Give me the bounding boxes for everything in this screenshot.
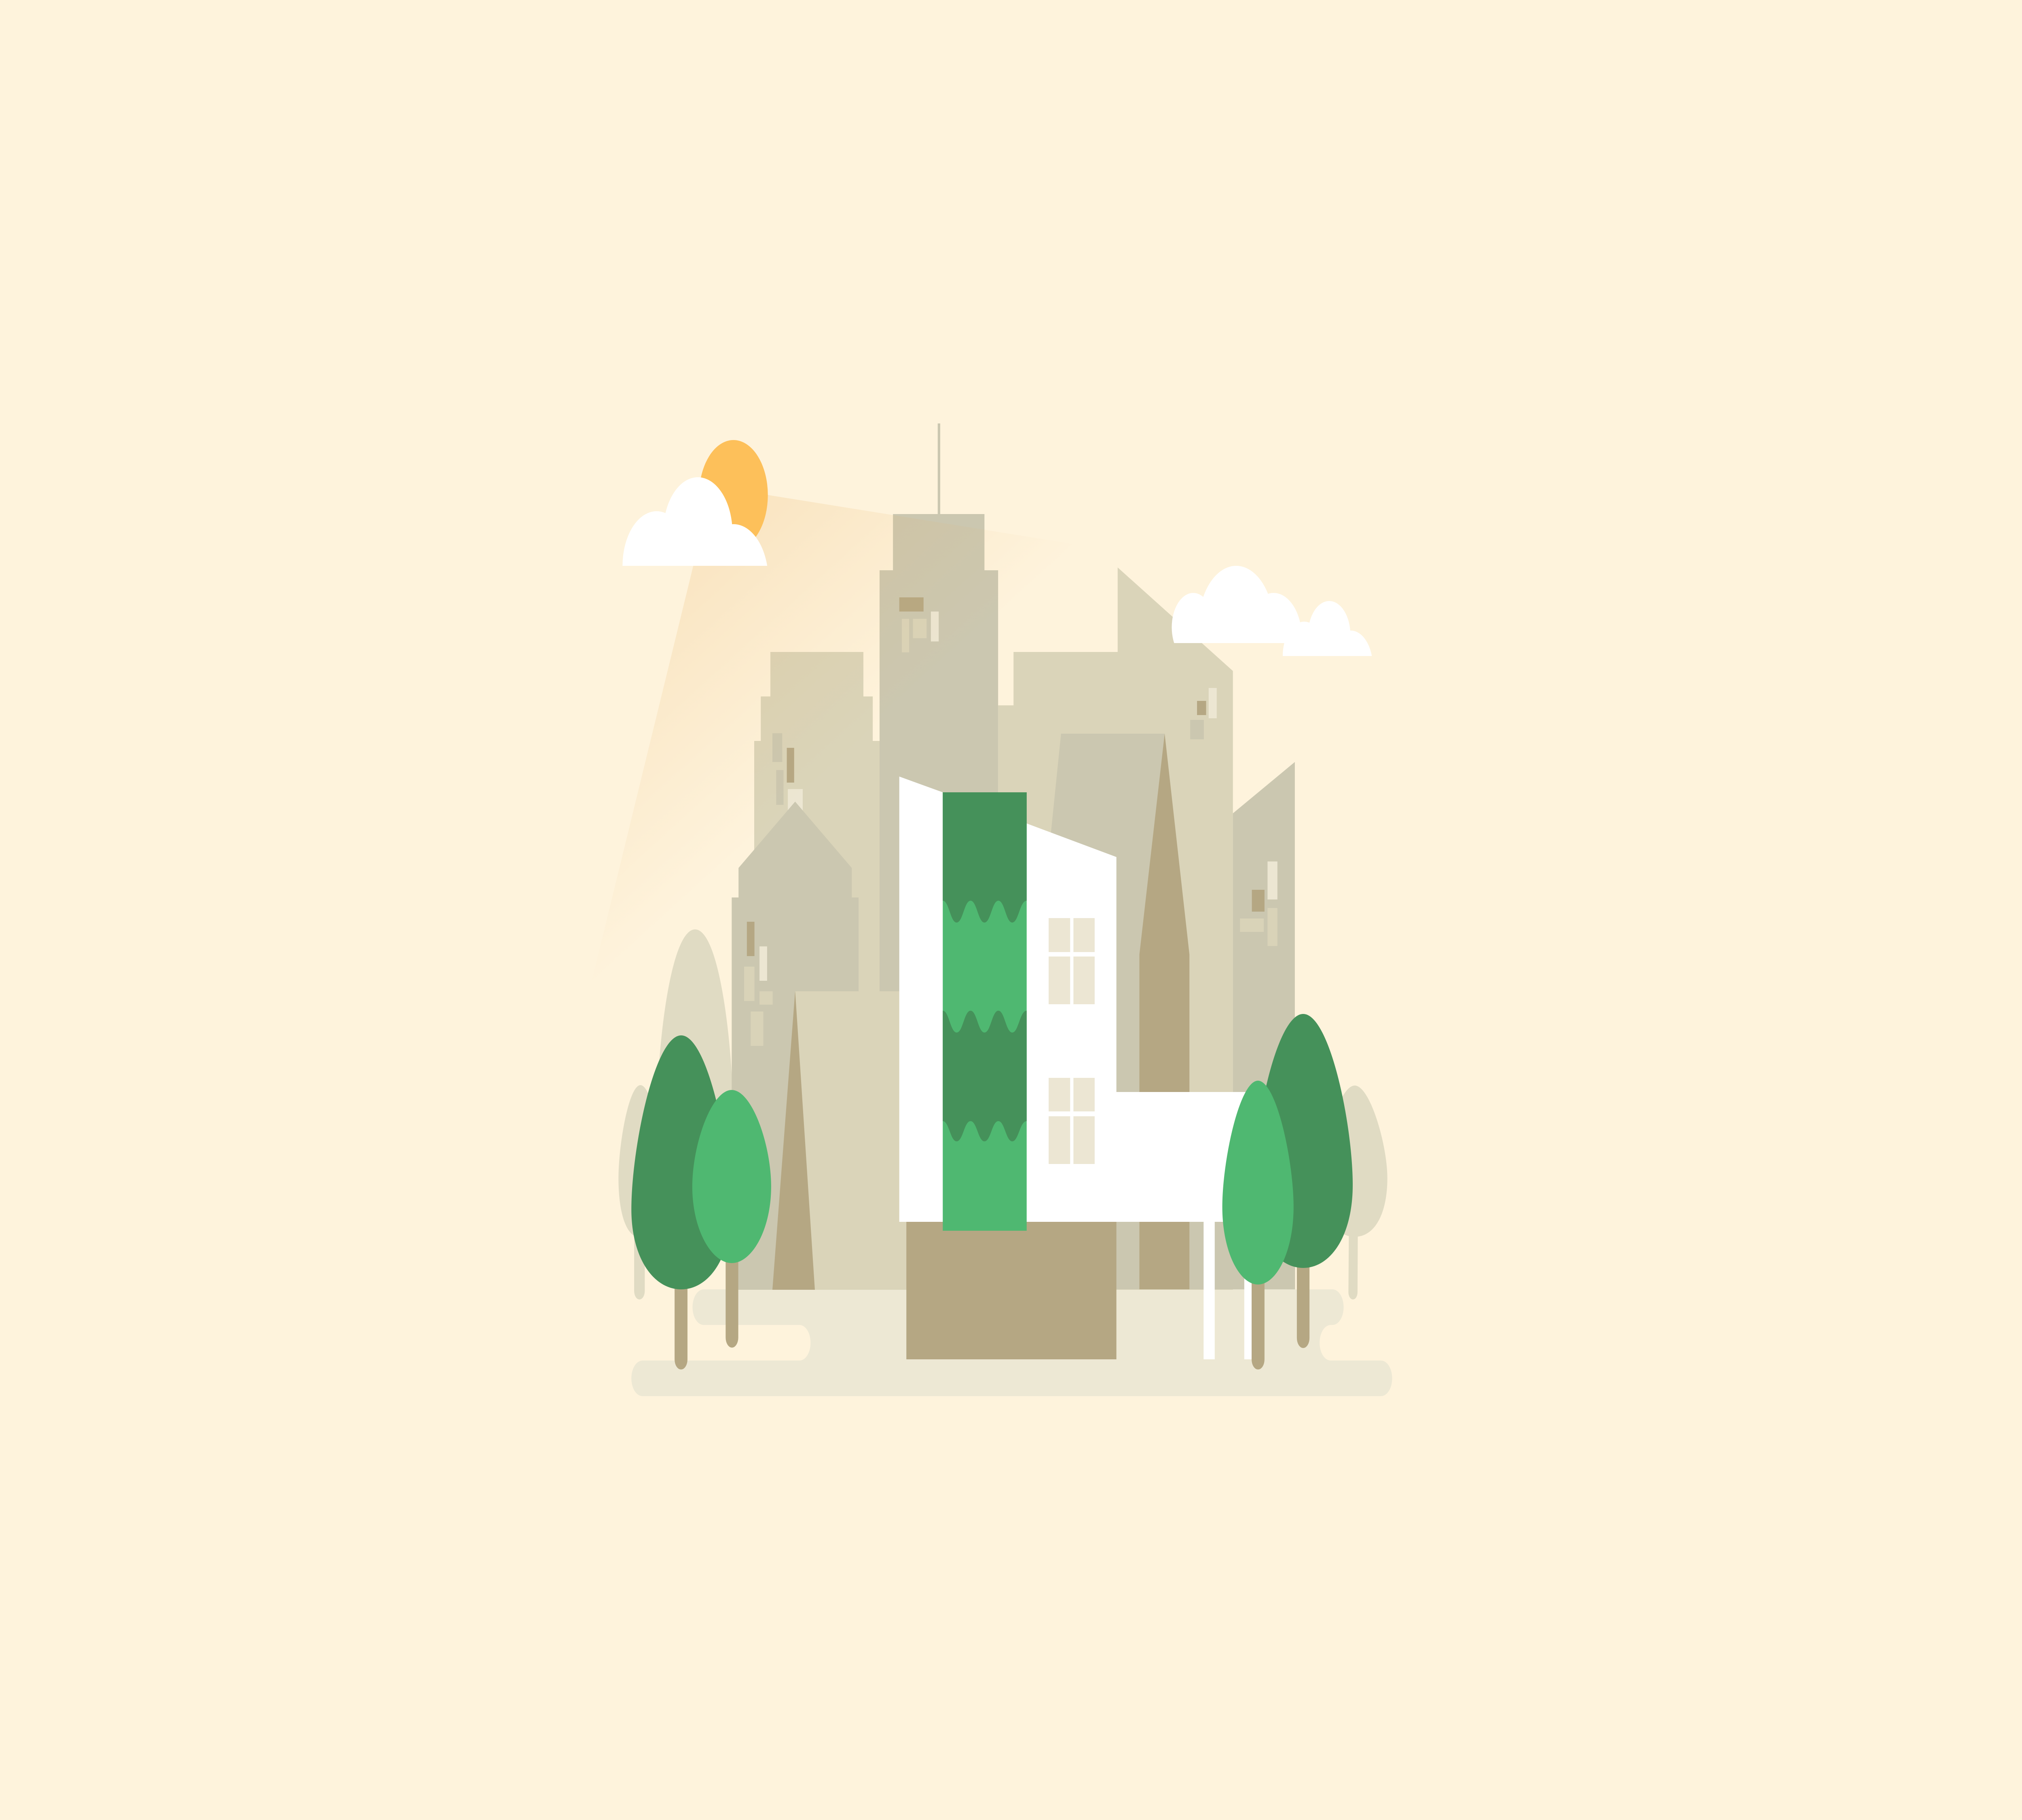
building: brown spire [1140,734,1189,1289]
building: brown triangle [772,991,815,1290]
building: grey house left [732,802,859,1290]
windows: grey right block [1240,861,1277,946]
window: upper [1049,918,1095,1004]
white facade [899,777,1255,1222]
illustration: green building in a city [619,423,1392,1396]
skyline buildings [732,423,1295,1290]
tree: light green left [692,1090,771,1348]
background tree: tall pale [657,929,733,1213]
windows: stepped left tower [772,733,794,805]
background tree: small pale right [1322,1086,1387,1299]
windows: large right block [1190,688,1217,739]
background tree: small pale left [618,1085,662,1299]
tree: dark green right [1254,1014,1353,1348]
tree: light green right [1222,1081,1294,1369]
ground path [631,1289,1392,1396]
icon: sun [699,440,768,550]
window: lower [1049,1078,1095,1164]
windows: central tower [899,597,939,652]
icon: cloud right large [1172,566,1300,643]
supporting legs [1203,1213,1255,1359]
building: grey lower strip [1117,1213,1295,1289]
icon: cloud left [622,477,768,566]
green panel: upper dark band [943,792,1027,923]
window: stepped tower, behind house roof [788,789,803,821]
green panel: middle dark band [943,1011,1027,1141]
tree: dark green left [631,1035,731,1369]
building: stepped left tower [754,652,885,1290]
building: central tower [880,423,998,991]
building: grey mid block [1044,734,1165,1289]
green panel [943,792,1027,1231]
windows: grey house [744,922,773,1046]
front building [899,777,1255,1359]
building: grey right block [1233,762,1295,1289]
building base [906,1222,1117,1359]
icon: cloud right small [1283,601,1372,656]
building: large right block [880,567,1233,1290]
sun rays [590,486,1081,990]
